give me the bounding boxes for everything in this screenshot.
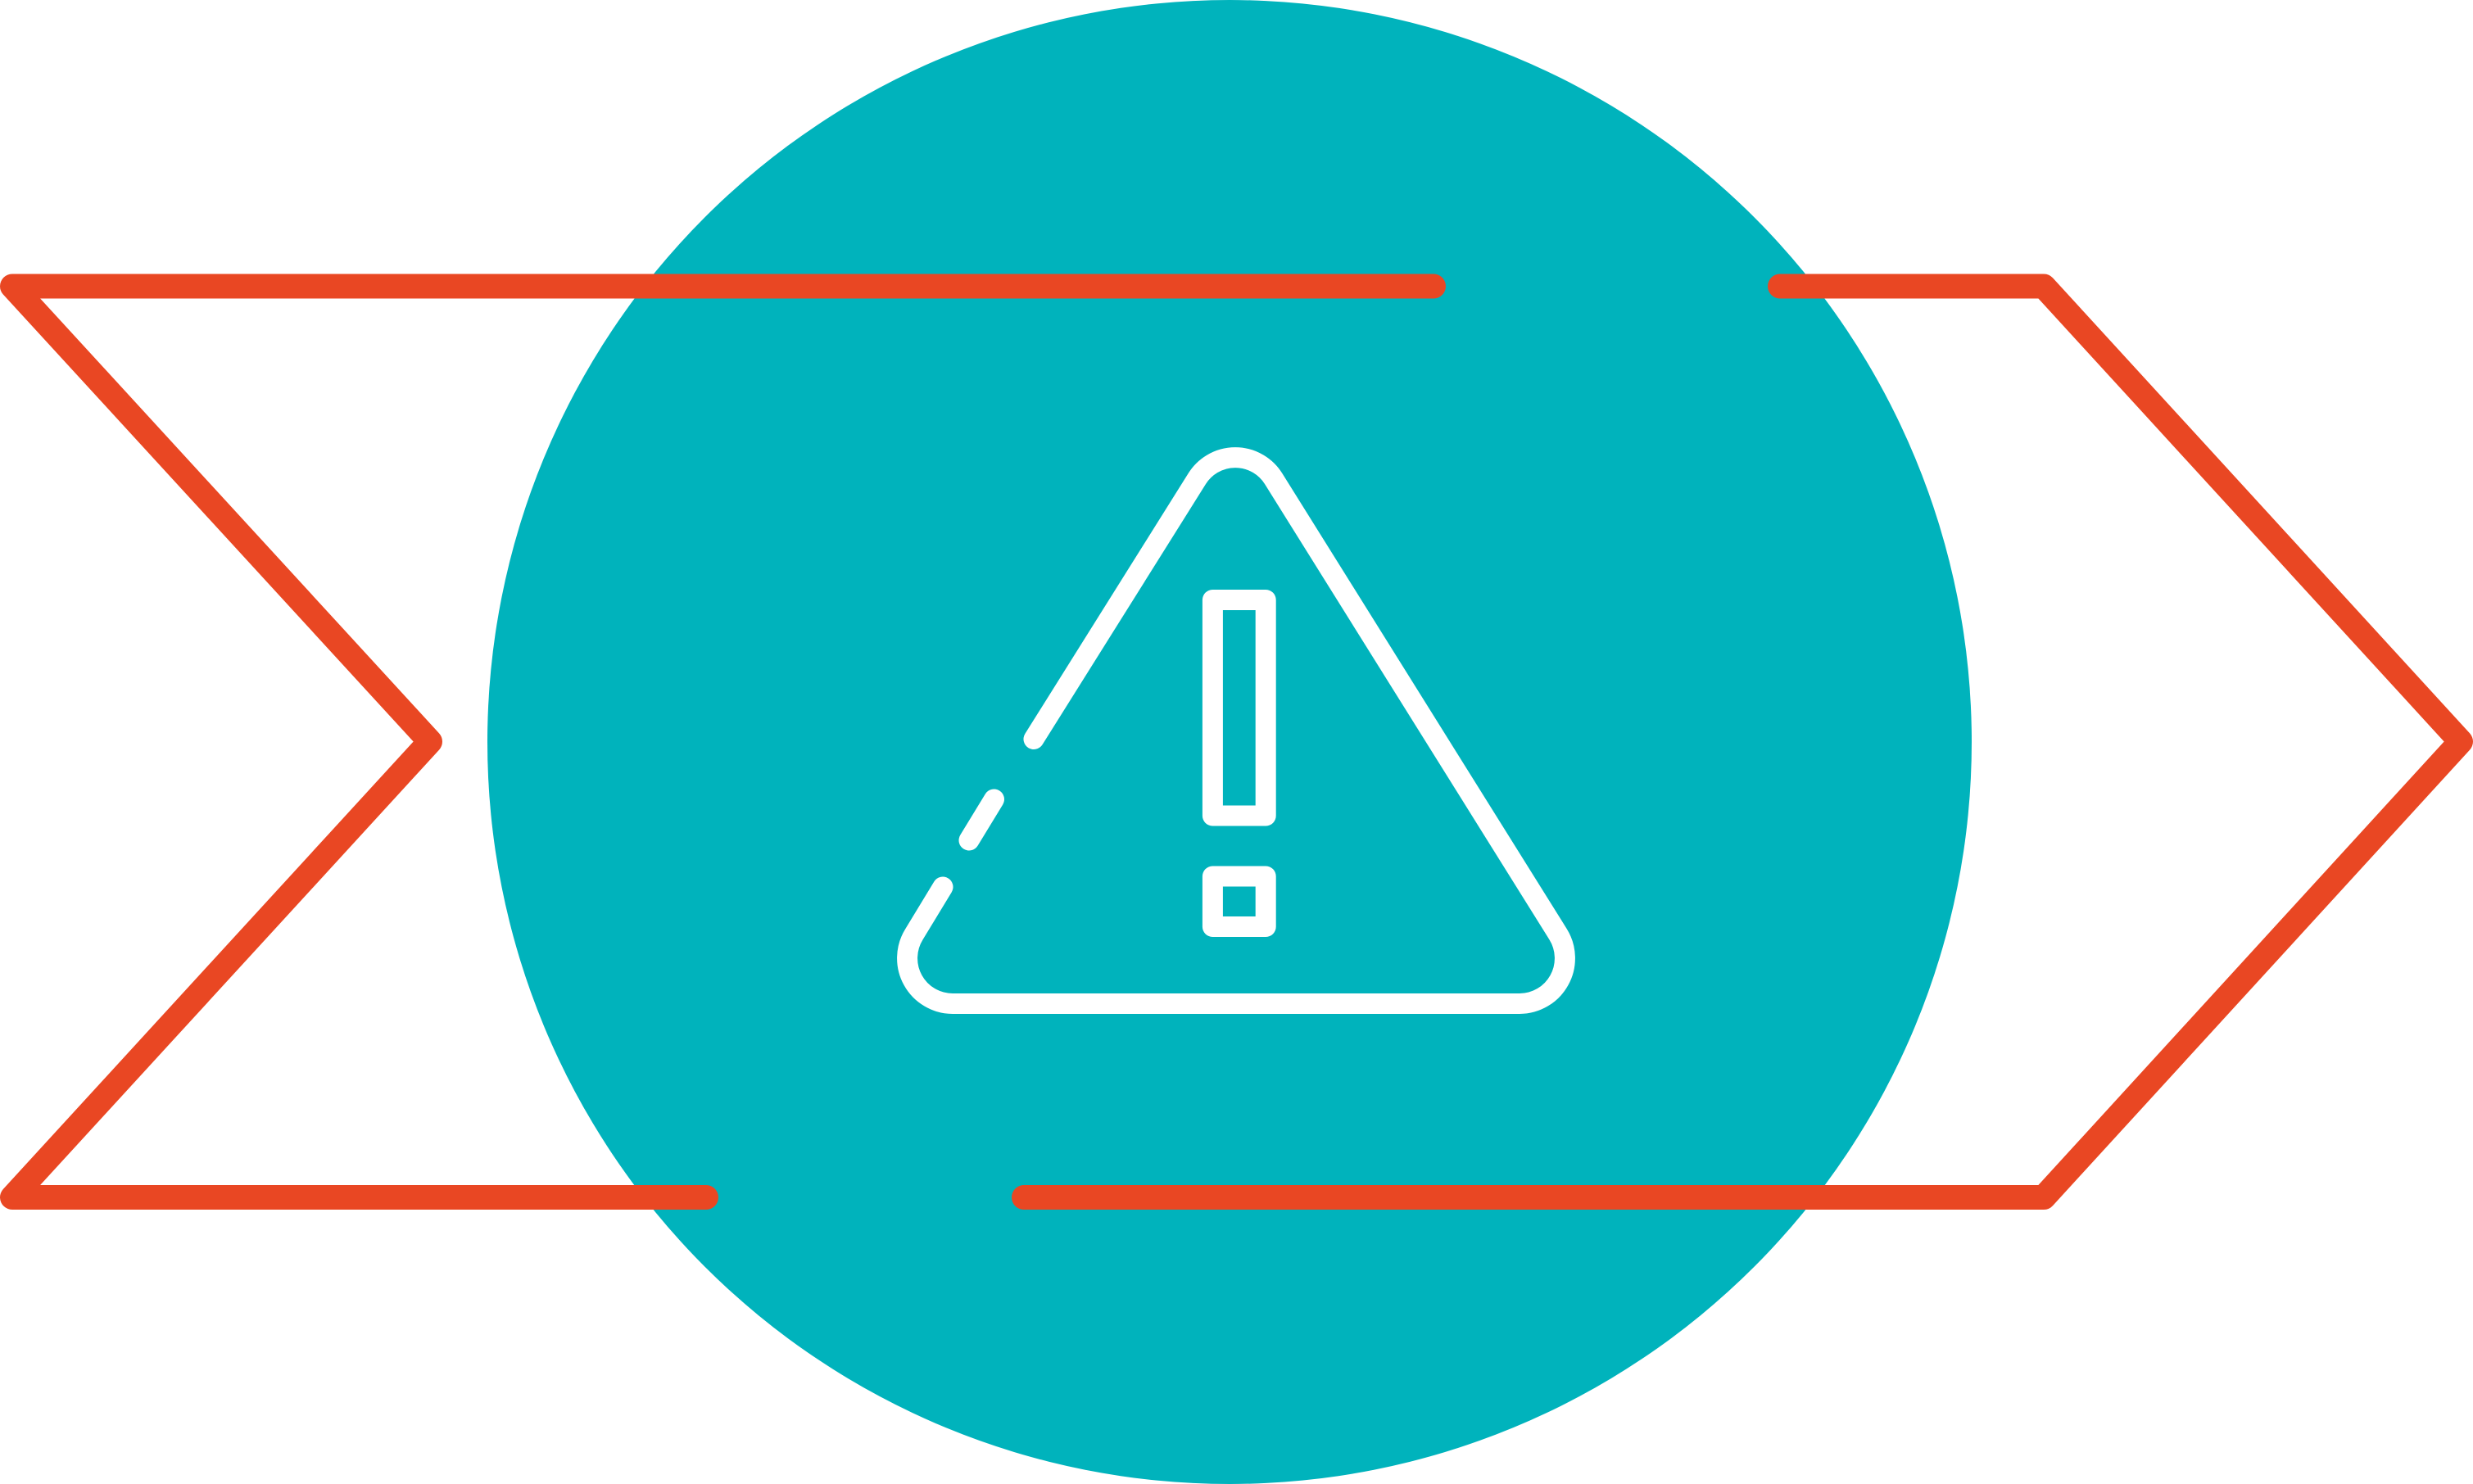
right chevron ribbon outline <box>1024 287 2461 1197</box>
teal circle <box>487 0 1972 1484</box>
exclamation mark bar <box>1212 599 1266 816</box>
icon: warning triangle <box>908 458 1565 1004</box>
triangle outline <box>908 458 1565 1004</box>
left chevron ribbon outline <box>12 287 1434 1197</box>
exclamation mark dot <box>1212 876 1266 927</box>
triangle outline gap dash <box>969 799 994 840</box>
